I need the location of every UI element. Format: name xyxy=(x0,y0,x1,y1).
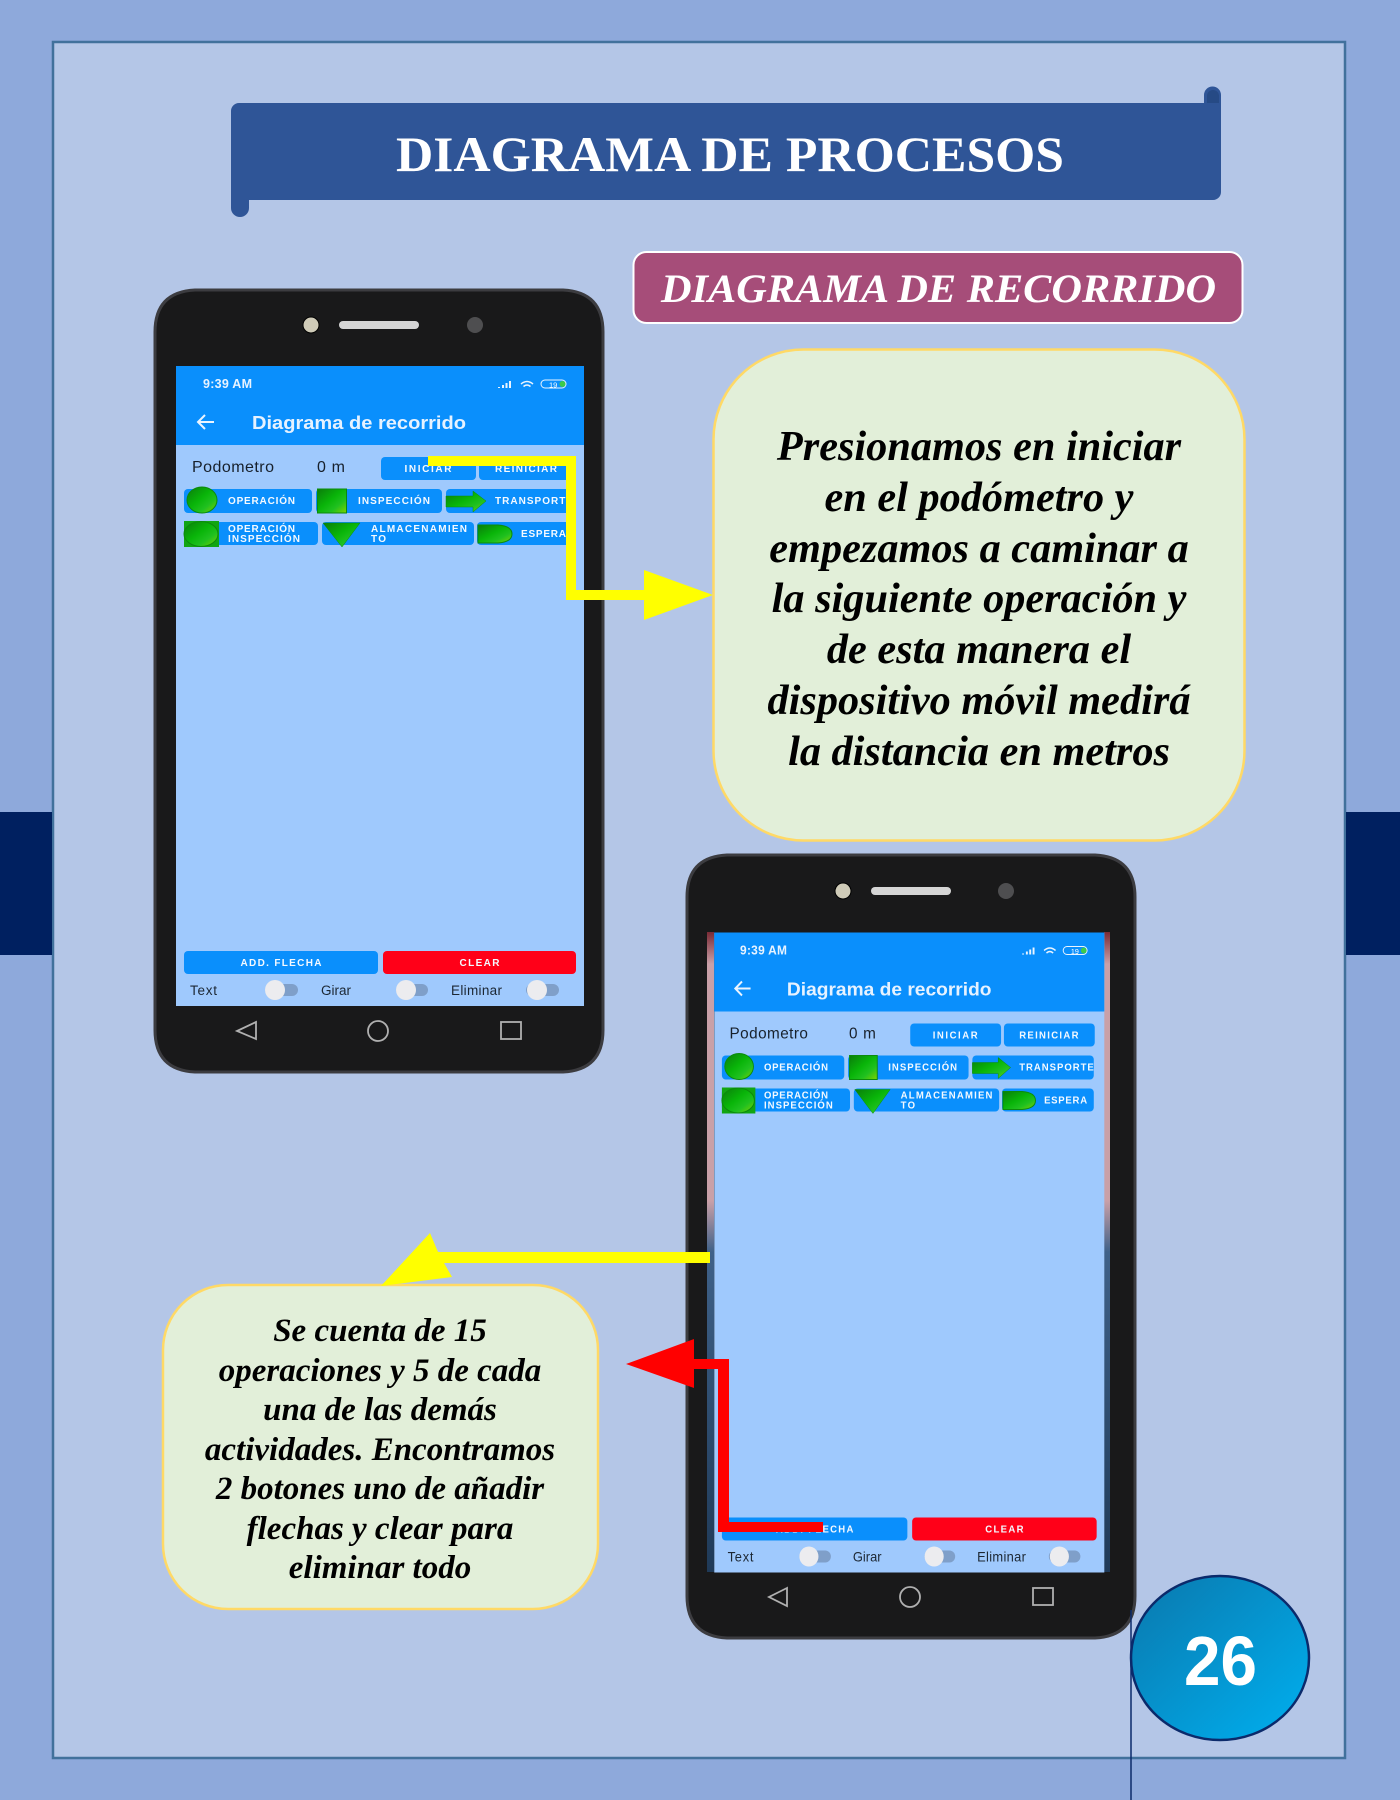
app title: Diagrama de recorrido xyxy=(252,412,466,433)
callout: pedometer instructions: dispositivo móvil medirá xyxy=(768,677,1191,724)
storage button: TO xyxy=(371,534,386,545)
clear button: CLEAR xyxy=(460,958,500,969)
storage button: ALMACENAMIEN xyxy=(371,524,467,535)
page number badge xyxy=(1131,1576,1309,1740)
callout: operation counts xyxy=(163,1285,598,1609)
status time: 9:39 AM xyxy=(740,943,787,958)
phone 1 camera xyxy=(303,317,319,333)
callout: pedometer instructions: de esta manera el xyxy=(827,626,1131,673)
delete toggle xyxy=(977,1546,1080,1566)
restart button xyxy=(479,457,574,480)
page number badge: 26 xyxy=(1184,1622,1257,1700)
status icons: 19 xyxy=(549,380,557,390)
inspection button: INSPECCIÓN xyxy=(888,1061,957,1074)
pedometer value: 0 m xyxy=(317,459,345,476)
callout: operation counts: Se cuenta de 15 xyxy=(273,1313,487,1349)
callout: operation counts: operaciones y 5 de cada xyxy=(219,1353,541,1389)
phone 2 camera xyxy=(835,883,851,899)
transport button: TRANSPORTE xyxy=(1019,1062,1094,1074)
back arrow xyxy=(198,415,214,429)
storage button: ALMACENAMIEN xyxy=(901,1090,992,1102)
status icons xyxy=(1022,946,1087,956)
right navy side tab xyxy=(1346,812,1400,955)
status icons xyxy=(498,380,566,390)
callout: operation counts: una de las demás xyxy=(263,1392,497,1428)
phone 2 nav buttons xyxy=(769,1587,1053,1607)
left navy side tab xyxy=(0,812,52,955)
transport button: TRANSPORTE xyxy=(495,496,573,507)
phone 1 screen xyxy=(176,366,584,1006)
inspection button: INSPECCIÓN xyxy=(358,494,430,507)
callout: pedometer instructions xyxy=(714,350,1244,840)
status time: 9:39 AM xyxy=(203,377,252,391)
callout: pedometer instructions: la siguiente operación y xyxy=(772,575,1187,622)
callout: pedometer instructions: en el podómetro y xyxy=(825,474,1134,521)
text toggle xyxy=(190,980,298,1000)
text toggle: Text xyxy=(190,983,217,998)
callout: pedometer instructions: empezamos a caminar a xyxy=(769,525,1189,572)
callout: operation counts: actividades. Encontramos xyxy=(205,1432,555,1468)
phone 1 xyxy=(155,290,603,1072)
callout: pedometer instructions: la distancia en metros xyxy=(788,728,1170,775)
operation-inspection button: INSPECCIÓN xyxy=(228,532,300,545)
clear button xyxy=(383,951,576,974)
wait button xyxy=(477,522,573,545)
start button xyxy=(381,457,476,480)
delete toggle: Eliminar xyxy=(451,983,502,998)
operation button: OPERACIÓN xyxy=(228,494,295,507)
rotate toggle: Girar xyxy=(321,983,352,998)
app bar xyxy=(714,932,1104,1012)
wait button: ESPERA xyxy=(1044,1095,1087,1107)
restart button: REINICIAR xyxy=(495,464,558,475)
add arrow button: ADD. FLECHA xyxy=(240,958,322,969)
operation-inspection button xyxy=(184,521,318,547)
phone 1 nav buttons xyxy=(237,1021,521,1041)
callout: operation counts: flechas y clear para xyxy=(247,1511,513,1547)
inspection button xyxy=(316,489,442,513)
back arrow xyxy=(735,982,751,996)
phone 2 screen edge left xyxy=(707,932,714,1572)
status icons: 19 xyxy=(1071,947,1079,956)
callout: pedometer instructions: Presionamos en iniciar xyxy=(776,423,1182,470)
pedometer label: Podometro xyxy=(192,459,274,476)
rotate toggle xyxy=(853,1546,955,1566)
rotate toggle xyxy=(321,980,428,1000)
wait button xyxy=(1002,1088,1094,1112)
operation-inspection button xyxy=(722,1088,850,1114)
phone 1 speaker xyxy=(339,321,419,329)
text toggle xyxy=(728,1546,831,1566)
phone 2 screen xyxy=(714,932,1104,1572)
phone 2 screen edge right xyxy=(1104,932,1110,1572)
phone 1 sensor xyxy=(467,317,483,333)
callout: operation counts: eliminar todo xyxy=(289,1550,471,1586)
start button xyxy=(910,1024,1001,1046)
phone 2 speaker xyxy=(871,887,951,895)
add arrow button: ADD. FLECHA xyxy=(776,1524,853,1536)
arrow: red from add arrow button to second callout xyxy=(626,1339,823,1532)
storage button xyxy=(322,522,474,547)
subtitle badge xyxy=(634,252,1242,323)
subtitle badge: DIAGRAMA DE RECORRIDO xyxy=(660,266,1216,311)
operation-inspection button: OPERACIÓN xyxy=(228,522,295,535)
delete toggle xyxy=(451,980,559,1000)
storage button xyxy=(854,1088,999,1114)
phone 2 body xyxy=(687,855,1135,1638)
text toggle: Text xyxy=(728,1549,754,1565)
phone 2 xyxy=(687,855,1135,1638)
operation button xyxy=(184,487,312,513)
clear button xyxy=(912,1518,1097,1540)
phone 1 body xyxy=(155,290,603,1072)
transport button xyxy=(446,489,573,513)
phone 2 sensor xyxy=(998,883,1014,899)
inspection button xyxy=(848,1056,969,1080)
restart button xyxy=(1004,1024,1095,1046)
rotate toggle: Girar xyxy=(853,1549,882,1565)
operation button xyxy=(722,1054,844,1080)
transport button xyxy=(972,1056,1094,1080)
add arrow button xyxy=(184,951,378,974)
delete toggle: Eliminar xyxy=(977,1549,1026,1565)
app title: Diagrama de recorrido xyxy=(787,979,991,1000)
pedometer value: 0 m xyxy=(849,1025,876,1043)
operation-inspection button: OPERACIÓN xyxy=(764,1089,828,1102)
title: DIAGRAMA DE PROCESOS xyxy=(396,126,1064,182)
wait button: ESPERA xyxy=(521,529,566,540)
arrow: yellow from second phone to second callout xyxy=(381,1233,710,1286)
add arrow button xyxy=(722,1518,907,1540)
clear button: CLEAR xyxy=(985,1524,1024,1536)
pedometer label: Podometro xyxy=(730,1025,808,1043)
operation-inspection button: INSPECCIÓN xyxy=(764,1099,833,1112)
start button: INICIAR xyxy=(933,1030,978,1042)
start button: INICIAR xyxy=(404,464,452,475)
storage button: TO xyxy=(901,1100,915,1112)
page number line xyxy=(1130,1610,1132,1800)
operation button: OPERACIÓN xyxy=(764,1061,828,1074)
restart button: REINICIAR xyxy=(1019,1030,1078,1042)
app bar xyxy=(176,366,584,445)
callout: operation counts: 2 botones uno de añadir xyxy=(215,1471,545,1507)
arrow: yellow from start button to first callout xyxy=(428,456,713,620)
title banner xyxy=(231,86,1221,217)
